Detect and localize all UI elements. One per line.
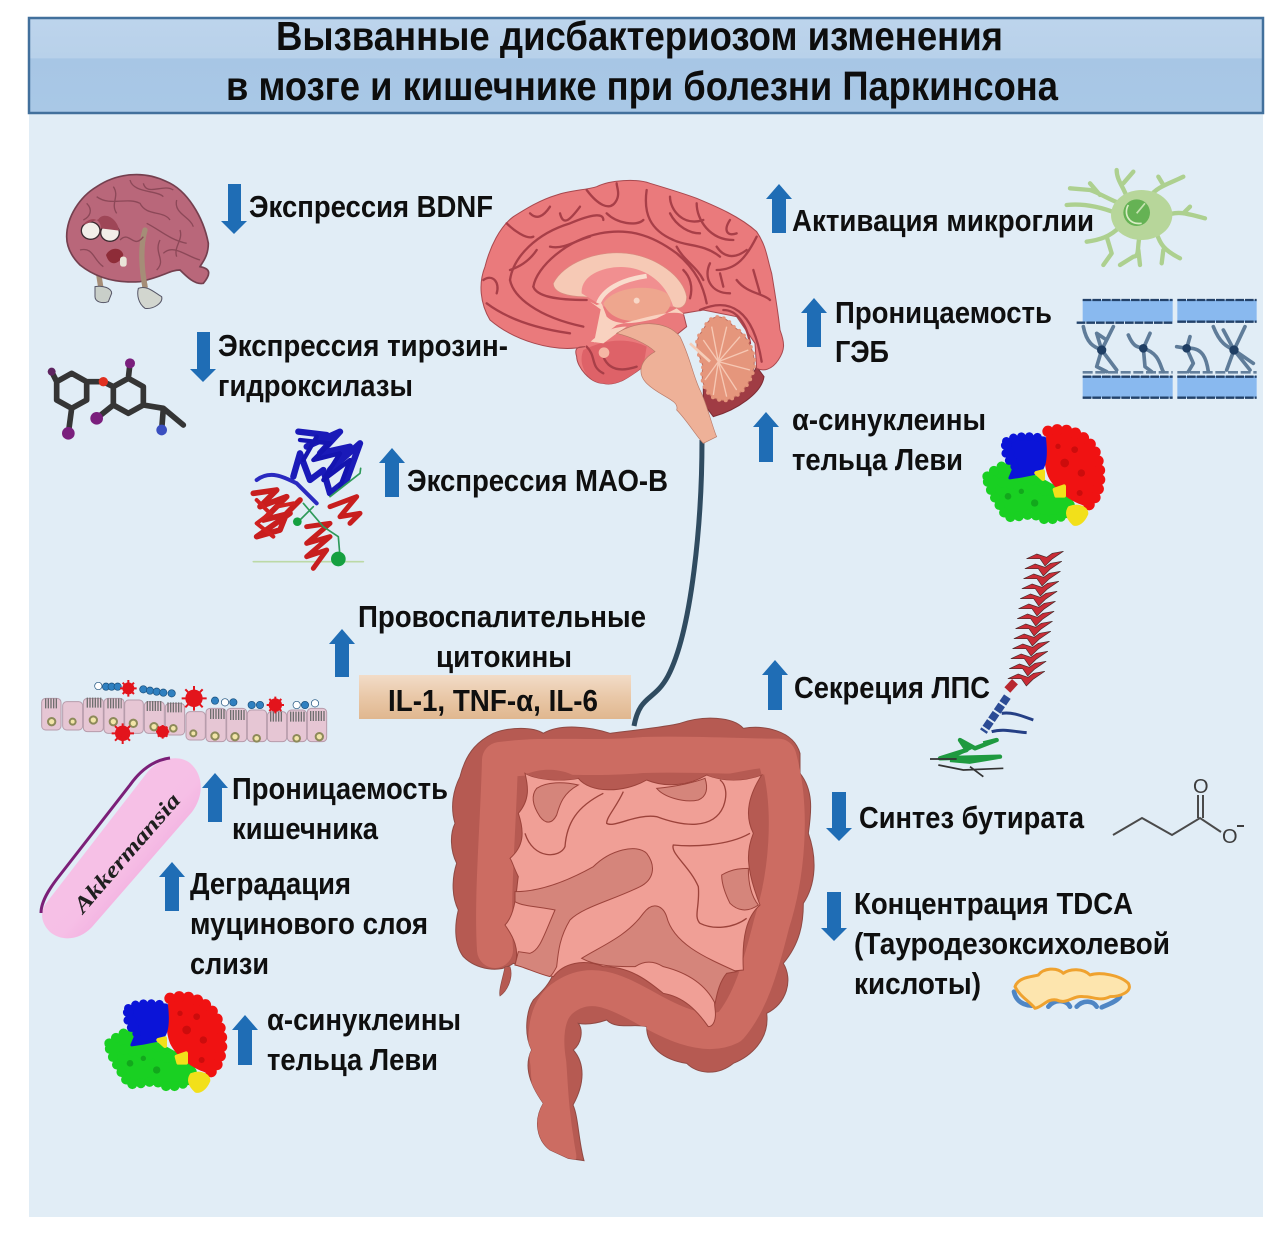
icon: alpha-synuclein protein (gut) xyxy=(109,997,222,1091)
arrow up: MAO-B xyxy=(379,448,405,497)
label: pro-inflammatory cytokines: цитокины xyxy=(436,639,572,674)
label: alpha-synuclein brain xyxy=(792,402,986,477)
label: alpha-synuclein gut xyxy=(267,1002,461,1077)
arrow up: alpha-synuclein brain xyxy=(753,412,779,462)
label: BBB permeability: Проницаемость xyxy=(835,295,1052,330)
title line 2: в мозге и кишечнике при болезни Паркинсона xyxy=(226,63,1059,109)
arrow down: butyrate xyxy=(826,792,852,841)
label: mucin degradation: Деградация xyxy=(190,866,351,901)
label: mucin degradation: муцинового слоя xyxy=(190,906,428,941)
label: TDCA concentration xyxy=(854,886,1170,1001)
label: alpha-synuclein gut: α-синуклеины xyxy=(267,1002,461,1037)
icon: vagus nerve connection xyxy=(634,440,702,726)
cytokine names box xyxy=(359,675,631,719)
arrow up: microglia xyxy=(766,184,792,233)
label: mucin degradation xyxy=(190,866,428,981)
label: TDCA concentration: (Тауродезоксихолевой xyxy=(854,926,1170,961)
cytokine names box: IL-1, TNF-α, IL-6 xyxy=(388,683,598,718)
icon: Akkermansia bacterium xyxy=(41,758,201,938)
label: TDCA concentration: Концентрация TDCA xyxy=(854,886,1133,921)
arrow down: TDCA xyxy=(821,892,847,941)
label: pro-inflammatory cytokines: Провоспалительные xyxy=(358,599,646,634)
arrow up: gut permeability xyxy=(202,773,228,822)
label: gut permeability: Проницаемость xyxy=(232,771,448,806)
label: LPS secretion: Секреция ЛПС xyxy=(794,670,990,705)
label: tyrosine hydroxylase xyxy=(218,328,508,403)
label: gut permeability xyxy=(232,771,448,846)
title line 1: Вызванные дисбактериозом изменения xyxy=(276,13,1003,59)
label: butyrate synthesis: Синтез бутирата xyxy=(859,800,1085,835)
icon: MAO-B protein xyxy=(253,432,363,568)
icon: butyrate formula: O xyxy=(1222,826,1238,848)
icon: microglia cell xyxy=(1067,170,1205,265)
arrow down: BDNF xyxy=(221,184,247,234)
icon: TDCA molecule xyxy=(1014,969,1129,1008)
label: BBB permeability xyxy=(835,295,1052,369)
arrow up: LPS xyxy=(762,660,788,710)
label: BBB permeability: ГЭБ xyxy=(835,334,889,369)
label: alpha-synuclein brain: α-синуклеины xyxy=(792,402,986,437)
label: TDCA concentration: кислоты) xyxy=(854,966,981,1001)
arrow up: alpha-synuclein gut xyxy=(232,1015,258,1065)
label: tyrosine hydroxylase: Экспрессия тирозин- xyxy=(218,328,508,363)
arrow up: cytokines xyxy=(329,629,355,677)
icon: intestine xyxy=(451,718,814,1161)
icon: blood-brain barrier xyxy=(1077,300,1257,398)
label: MAO-B: Экспрессия МАО-В xyxy=(407,463,668,498)
icon: butyrate formula xyxy=(1113,776,1244,848)
label: pro-inflammatory cytokines xyxy=(358,599,646,674)
label: tyrosine hydroxylase: гидроксилазы xyxy=(218,368,413,403)
label: alpha-synuclein gut: тельца Леви xyxy=(267,1042,438,1077)
icon: tyrosine molecule xyxy=(48,358,183,440)
label: alpha-synuclein brain: тельца Леви xyxy=(792,442,963,477)
arrow up: mucin degradation xyxy=(159,862,185,911)
icon: butyrate formula: O xyxy=(1193,776,1209,798)
label: microglia activation: Активация микроглии xyxy=(792,203,1094,238)
arrow up: BBB permeability xyxy=(801,298,827,347)
label: mucin degradation: слизи xyxy=(190,946,269,981)
icon: sagittal brain xyxy=(481,180,784,443)
icon: alpha-synuclein protein (brain) xyxy=(987,430,1100,524)
label: Akkermansia: Akkermansia xyxy=(66,788,185,919)
label: gut permeability: кишечника xyxy=(232,811,379,846)
icon: gut epithelium xyxy=(42,680,327,744)
label: BDNF: Экспрессия BDNF xyxy=(249,189,493,224)
icon: lipopolysaccharide chain xyxy=(930,551,1063,777)
arrow down: tyrosine hydroxylase xyxy=(190,332,216,382)
icon: sad brain cartoon xyxy=(67,175,209,308)
title banner xyxy=(29,13,1263,113)
